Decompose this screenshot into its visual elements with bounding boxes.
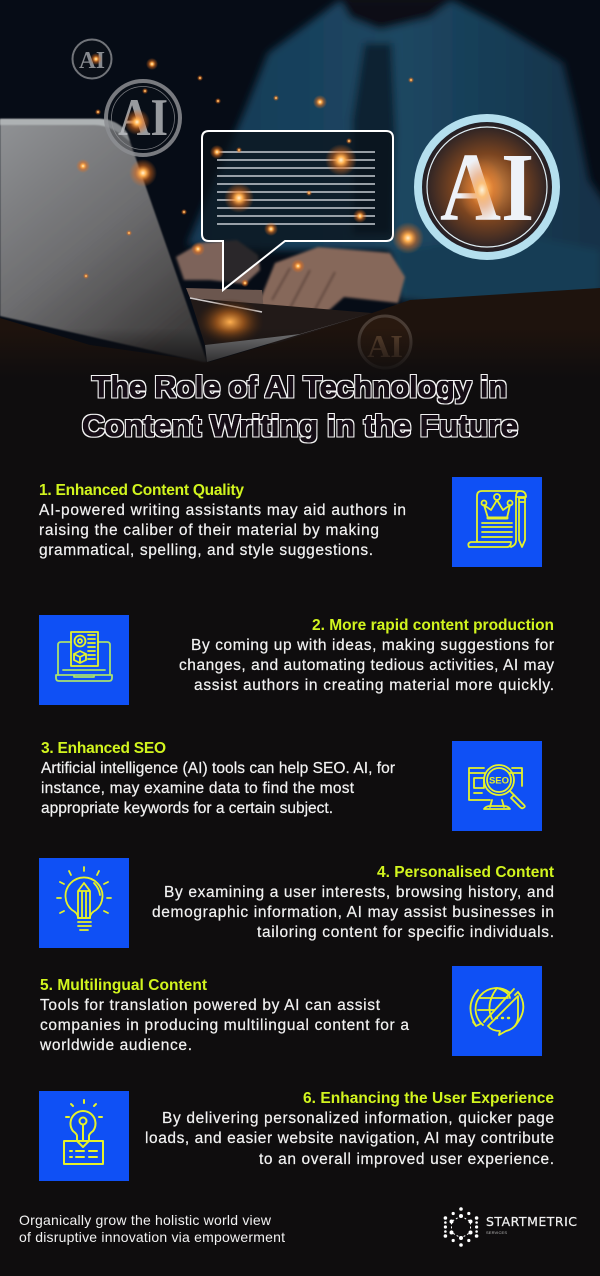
footer tagline: of disruptive innovation via empowerment [19,1229,285,1245]
large AI badge [418,118,556,256]
title: The Role of AI Technology in [92,371,507,404]
faded AI badge over table: AI [367,328,403,364]
title [82,371,518,443]
faded AI badge over table [359,316,411,368]
glowing particles [76,53,424,287]
text: section 1: raising the caliber of their material by making [39,522,379,539]
man's shirt [187,0,600,310]
footer tagline: Organically grow the holistic world view [19,1212,272,1228]
section 1: enhanced content quality [39,477,542,567]
text: section 6 [145,1090,554,1168]
logo mark: dotted hexagon [444,1207,478,1247]
text: section 4 [152,864,554,941]
small AI badge [72,40,112,78]
medium AI badge: AI [118,89,168,147]
logo: Startmetric [444,1207,577,1247]
icon: globe and chat bubble with arrows [452,966,542,1056]
text: section 3: instance, may examine data to find the most [41,780,355,797]
text: section 2: 2. More rapid content production [312,617,554,634]
text: section 6: 6. Enhancing the User Experience [303,1090,554,1107]
footer tagline [19,1212,285,1245]
text: section 2: changes, and automating tedious activities, AI may [179,657,554,674]
text: section 1: grammatical, spelling, and style suggestions. [39,542,373,559]
section 2: more rapid content production [39,615,554,705]
icon: laptop with gear and cube document [39,615,129,705]
text: section 1 [39,482,406,559]
text: section 6: loads, and easier website navigation, AI may contribute [145,1130,554,1147]
section 6: enhancing the user experience [39,1090,554,1181]
text: section 5: Tools for translation powered by AI can assist [40,997,381,1014]
text: section 5: 5. Multilingual Content [40,977,207,994]
logo wordmark: STARTMETRIC [486,1214,577,1229]
speech bubble with text lines [202,131,393,290]
text: section 4: 4. Personalised Content [377,864,554,881]
icon: document with crown and pencil [452,477,542,567]
text: section 2: assist authors in creating material more quickly. [194,677,554,694]
title: Content Writing in the Future [82,410,518,443]
section 5: multilingual content [39,966,542,1056]
laptop [0,119,372,362]
text: section 3 [41,740,395,817]
text: section 1: AI-powered writing assistants may aid authors in [39,502,406,519]
text: section 2 [179,617,554,694]
text: section 1: 1. Enhanced Content Quality [39,482,244,499]
small AI badge: AI [79,48,105,74]
text: section 3: 3. Enhanced SEO [41,740,166,757]
text: section 6: to an overall improved user experience. [259,1151,554,1168]
medium AI badge [106,81,180,155]
large AI badge: AI [440,134,534,242]
text: section 5: companies in producing multilingual content for a [40,1017,409,1034]
text: section 4: By examining a user interests, browsing history, and [164,884,554,901]
text: section 5: worldwide audience. [39,1037,192,1054]
icon: SEO magnifier on monitor [452,741,542,831]
text: section 3: Artificial intelligence (AI) tools can help SEO. AI, for [41,760,395,777]
table [0,288,600,378]
section 3: enhanced SEO [41,740,542,831]
icon: light bulb above keyboard panel [39,1091,129,1181]
bottom fade [0,328,600,378]
text: section 4: demographic information, AI may assist businesses in [152,904,554,921]
SEO label: SEO [489,776,509,786]
hero photo: person typing on laptop [0,0,600,378]
logo subline: SERVICES [486,1230,507,1235]
text: section 2: By coming up with ideas, making suggestions for [191,637,554,654]
text: section 3: appropriate keywords for a certain subject. [41,800,333,817]
text: section 4: tailoring content for specific individuals. [257,924,554,941]
icon: light bulb with pencil [39,858,129,948]
text: section 6: By delivering personalized information, quicker page [162,1110,554,1127]
text: section 5 [39,977,409,1054]
section 4: personalised content [39,858,554,948]
hands [176,240,405,320]
